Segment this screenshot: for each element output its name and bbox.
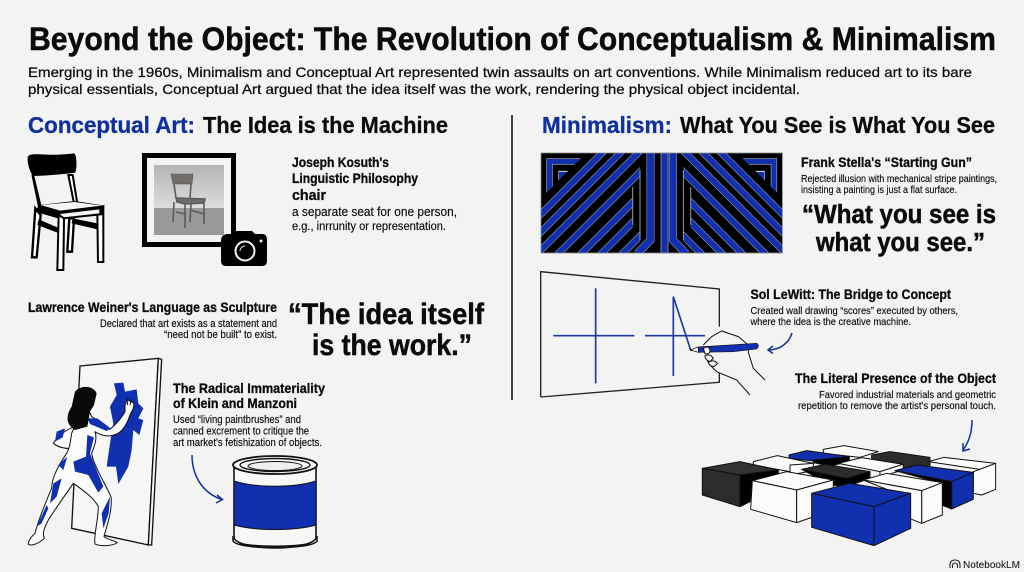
quote: what you see: “What you see is <box>802 201 996 229</box>
text: Kosuth: Joseph Kosuth's <box>292 155 389 170</box>
blue box <box>895 465 973 482</box>
text: Klein and Manzoni <box>173 381 325 449</box>
arrow: to paint can <box>192 455 222 503</box>
text: LeWitt: Created wall drawing “scores” executed by others, <box>750 305 958 317</box>
text: Kosuth: chair <box>292 187 326 204</box>
wall <box>541 272 719 397</box>
icon: camera <box>221 231 267 266</box>
heading: minimalism: What You See is What You See <box>680 112 995 138</box>
text: Klein and Manzoni: art market's fetishization of objects. <box>173 437 322 449</box>
text: Klein and Manzoni: canned excrement to critique the <box>173 426 309 438</box>
icon: chair <box>28 153 104 270</box>
big black box <box>702 462 778 475</box>
big blue box <box>812 483 911 507</box>
paint mark <box>107 383 143 484</box>
back left white box <box>753 456 813 472</box>
body paint <box>37 418 111 528</box>
text: Weiner: Declared that art exists as a statement and <box>100 318 277 330</box>
drawn lines <box>553 288 705 383</box>
hand fingers <box>127 399 131 405</box>
text: Klein and Manzoni: Used “living paintbrushes” and <box>173 414 301 426</box>
illustration: LeWitt wall drawing <box>541 272 765 397</box>
middle white box <box>838 458 903 472</box>
canvas <box>72 358 158 545</box>
quote: what you see: what you see.” <box>815 229 985 257</box>
text: Stella: insisting a painting is just a flat surface. <box>801 184 957 196</box>
text: Klein and Manzoni: The Radical Immateriality <box>173 381 325 396</box>
heading: minimalism <box>542 112 995 138</box>
intro paragraph <box>28 64 972 97</box>
text: literal presence: Favored industrial materials and geometric <box>819 389 996 401</box>
arrow: to boxes <box>963 420 972 451</box>
illustration: woman pressing painted body on canvas <box>28 358 162 546</box>
icon: framed photograph of chair <box>144 156 234 244</box>
intro paragraph: Emerging in the 1960s, Minimalism and Conceptual Art represented twin assaults on art conventions. While Minimalism reduced art to its bare <box>28 64 972 80</box>
logo: NotebookLM: NotebookLM <box>963 559 1020 571</box>
hair <box>68 387 97 430</box>
quote: what you see <box>802 201 996 257</box>
text: Weiner <box>28 300 277 341</box>
back white box <box>823 446 878 457</box>
text: LeWitt: Sol LeWitt: The Bridge to Concept <box>750 286 951 302</box>
center divider <box>511 115 513 400</box>
painting: Stella stripes <box>531 143 792 263</box>
text: Kosuth: e.g., inrrunity or representation. <box>292 221 446 233</box>
fingers <box>703 347 718 367</box>
body <box>28 399 134 546</box>
heading: conceptual art: Conceptual Art: <box>28 112 195 138</box>
heading: conceptual art: The Idea is the Machine <box>203 112 448 138</box>
text: literal presence <box>795 370 996 412</box>
arrow: to hand <box>768 333 792 354</box>
pen <box>691 343 758 352</box>
text: Weiner: “need not be built” to exist. <box>164 329 277 341</box>
quote: idea itself <box>288 298 484 362</box>
right white box <box>928 457 996 469</box>
quote: idea itself: is the work.” <box>312 329 472 362</box>
text: Kosuth <box>292 155 457 233</box>
photo of chair <box>154 165 224 235</box>
icon: paint can <box>233 456 317 548</box>
text: Kosuth: Linguistic Philosophy <box>292 171 418 186</box>
middle black box <box>802 464 870 478</box>
illustration: minimalist boxes <box>702 446 996 546</box>
text: literal presence: repetition to remove the artist's personal touch. <box>798 400 996 412</box>
heading: conceptual art <box>28 112 448 138</box>
text: Stella: Frank Stella's “Starting Gun” <box>801 154 972 170</box>
right front white box <box>863 473 942 491</box>
back blue box <box>789 451 849 463</box>
text: LeWitt <box>750 286 958 328</box>
text: Kosuth: a separate seat for one person, <box>292 205 457 219</box>
back black box <box>872 452 930 470</box>
far arm <box>53 427 75 449</box>
quote: idea itself: “The idea itself <box>288 298 484 331</box>
text: literal presence: The Literal Presence of the Object <box>795 370 996 386</box>
hand <box>703 331 763 397</box>
big white box <box>752 472 833 490</box>
heading: minimalism: Minimalism: <box>542 112 672 138</box>
text: Weiner: Lawrence Weiner's Language as Sculpture <box>28 300 277 315</box>
text: LeWitt: where the idea is the creative machine. <box>750 316 911 328</box>
text: Klein and Manzoni: of Klein and Manzoni <box>173 396 297 411</box>
intro paragraph: physical essentials, Conceptual Art argued that the idea itself was the work, rendering the physical object incidental. <box>28 81 800 97</box>
text: Stella <box>801 154 997 196</box>
